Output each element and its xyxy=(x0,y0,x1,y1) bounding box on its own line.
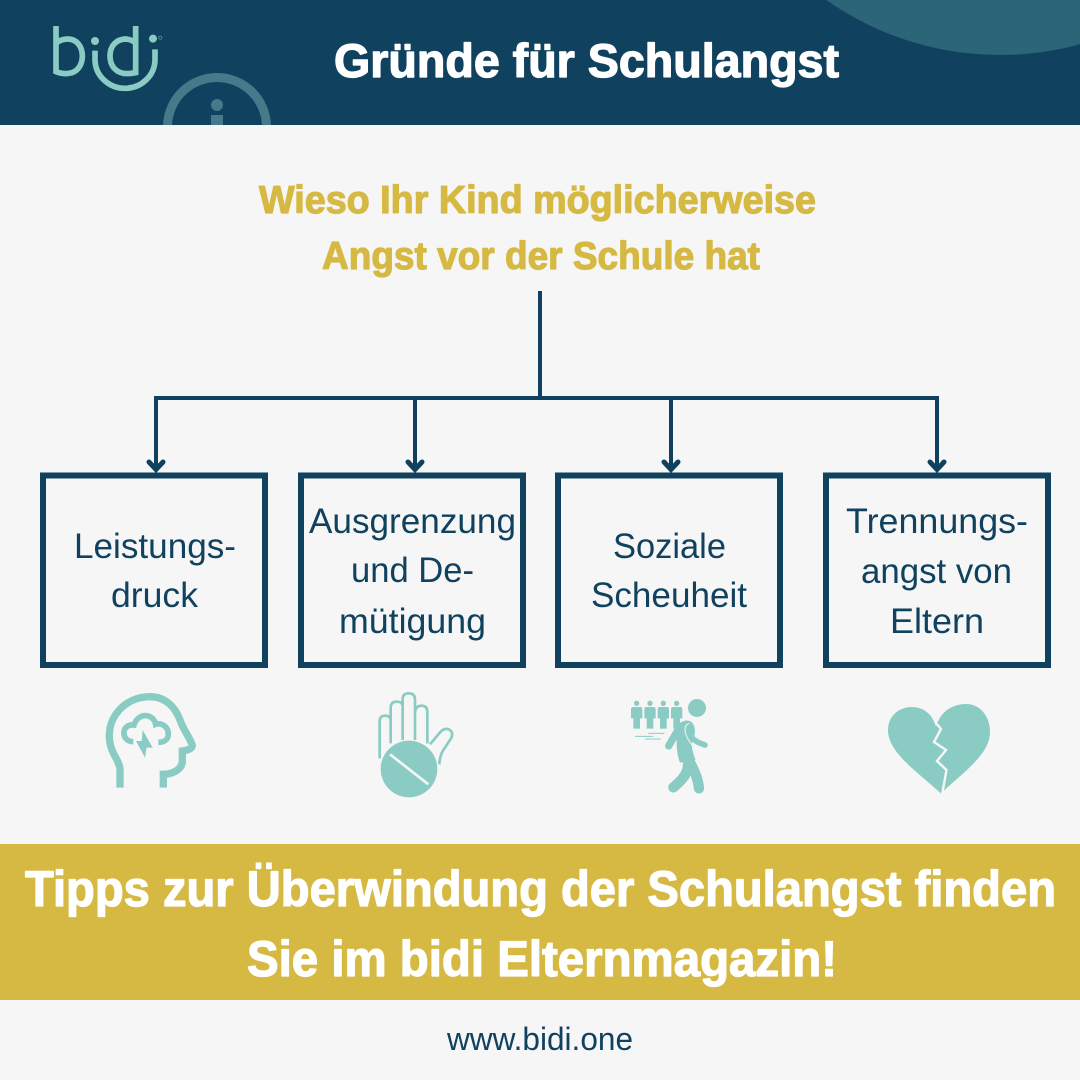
panel: Leistungsdruck xyxy=(43,476,265,665)
panel: Trennungsangst von Eltern: angst von xyxy=(861,551,1012,591)
panel: Soziale Scheuheit: Scheuheit xyxy=(591,575,747,615)
panel: Soziale Scheuheit xyxy=(558,476,780,665)
call to action band: Sie im bidi Elternmagazin! xyxy=(247,931,837,987)
panel: Leistungsdruck: druck xyxy=(111,575,198,615)
panel: Trennungsangst von Eltern: Eltern xyxy=(890,601,984,641)
panel: Leistungsdruck: Leistungs- xyxy=(74,526,236,566)
call to action band xyxy=(0,844,1080,1000)
icon: info circle xyxy=(168,77,266,125)
title: Gründe für Schulangst xyxy=(334,34,839,87)
panel: Ausgrenzung und Demütigung xyxy=(301,476,523,665)
icon: head with thundercloud xyxy=(109,697,192,788)
icon: broken heart xyxy=(888,704,990,795)
icon: hand with stop sign xyxy=(380,693,452,797)
subtitle: Wieso Ihr Kind möglicherweise xyxy=(259,179,816,222)
website url: www.bidi.one xyxy=(446,1021,633,1057)
header band xyxy=(0,0,1080,125)
subtitle: Angst vor der Schule hat xyxy=(322,235,760,278)
connector tree with arrows xyxy=(149,291,944,470)
panel: Ausgrenzung und Demütigung: Ausgrenzung xyxy=(309,501,516,541)
panel: Ausgrenzung und Demütigung: mütigung xyxy=(339,601,486,641)
panel: Ausgrenzung und Demütigung: und De- xyxy=(351,550,474,590)
logo: bidi xyxy=(56,26,162,88)
panel: Trennungsangst von Eltern: Trennungs- xyxy=(846,501,1028,541)
panel: Soziale Scheuheit: Soziale xyxy=(613,526,726,566)
panel: Trennungsangst von Eltern xyxy=(826,476,1048,665)
subtitle xyxy=(259,179,816,278)
icon: person walking away from group xyxy=(631,699,706,788)
